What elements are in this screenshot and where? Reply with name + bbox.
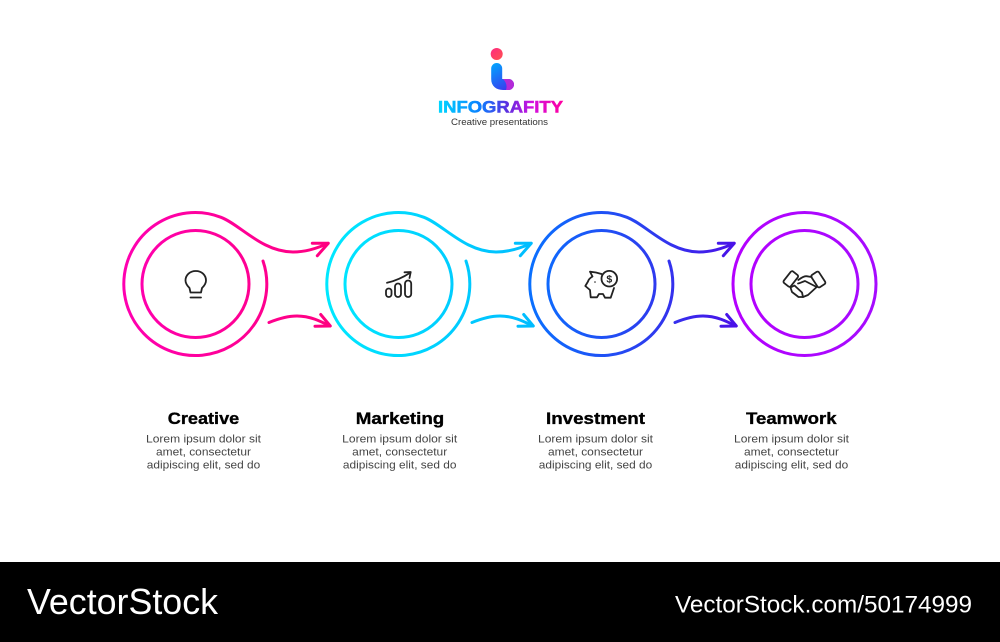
heading: Marketing: Marketing [356, 409, 444, 428]
logo mark [491, 48, 514, 90]
icon: piggy bank with coin [585, 271, 617, 298]
body: Marketing description [342, 434, 457, 472]
heading: Teamwork: Teamwork [746, 409, 837, 428]
body: Investment description [538, 434, 653, 472]
body: Marketing description: adipiscing elit, sed do [343, 460, 456, 472]
body: Creative description: amet, consectetur [156, 447, 251, 459]
step 4 rings: purple [733, 212, 876, 356]
body: Teamwork description [734, 434, 849, 472]
body: Investment description: amet, consectetur [548, 447, 643, 459]
step 3 text [538, 409, 653, 472]
body: Creative description: adipiscing elit, sed do [147, 460, 260, 472]
icon: light bulb [186, 271, 206, 298]
step 1 text [146, 409, 261, 472]
icon: handshake [783, 270, 826, 297]
heading: Investment: Investment [546, 409, 645, 428]
logo tagline: Creative presentations [451, 117, 548, 127]
body: Investment description: Lorem ipsum dolor sit [538, 434, 653, 446]
logo [438, 48, 564, 127]
footer brand: VectorStock [27, 581, 219, 622]
icon: growth chart [386, 272, 411, 297]
body: Marketing description: amet, consectetur [352, 447, 448, 459]
footer bar [0, 562, 1000, 642]
footer image id: VectorStock.com/50174999 [675, 592, 972, 618]
body: Teamwork description: Lorem ipsum dolor sit [734, 434, 849, 446]
body: Investment description: adipiscing elit, sed do [539, 460, 652, 472]
step 3 rings and arrows: blue [530, 213, 736, 356]
step 1 rings and arrows: pink [124, 213, 330, 356]
body: Creative description: Lorem ipsum dolor sit [146, 434, 261, 446]
body: Teamwork description: amet, consectetur [744, 447, 839, 459]
body: Marketing description: Lorem ipsum dolor sit [342, 434, 457, 446]
step 4 text [734, 409, 849, 472]
step 2 text [342, 409, 457, 472]
heading: Creative: Creative [168, 409, 239, 428]
body: Teamwork description: adipiscing elit, sed do [735, 460, 848, 472]
body: Creative description [146, 434, 261, 472]
coin dollar sign: $ [606, 273, 612, 285]
step 2 rings and arrows: cyan [327, 213, 533, 356]
logo wordmark: INFOGRAFITY [438, 97, 564, 116]
